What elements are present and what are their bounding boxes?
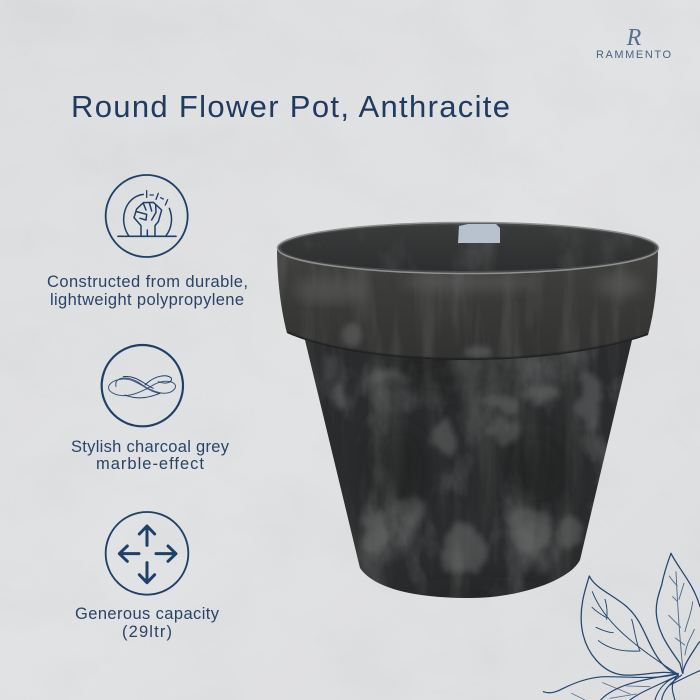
- pot rim: [277, 246, 658, 360]
- feature text: durable: lightweight polypropylene: [50, 291, 244, 309]
- feature text: durable: [47, 273, 248, 309]
- logo: Rammento: [596, 25, 671, 61]
- feature text: marble effect: marble-effect: [96, 455, 204, 473]
- logo monogram: R: [626, 25, 642, 51]
- left leaf: [581, 576, 678, 675]
- title: Round Flower Pot, Anthracite: [71, 89, 510, 124]
- feature text: capacity: [75, 605, 220, 641]
- feature text: marble effect: [71, 438, 230, 473]
- feature text: capacity: Generous capacity: [75, 605, 220, 623]
- logo wordmark: RAMMENTO: [596, 49, 671, 61]
- feature text: durable: Constructed from durable,: [47, 273, 248, 291]
- pot body: [305, 340, 632, 598]
- icon: four arrows in circle: [106, 512, 188, 595]
- feature text: capacity: (29ltr): [122, 623, 172, 641]
- decoration: leaf line art: [543, 553, 700, 700]
- pot photo: [270, 220, 665, 610]
- icon: marble swirl in circle: [102, 345, 183, 426]
- icon: raised fist in circle: [106, 175, 188, 257]
- upper leaf: [656, 553, 700, 673]
- drainage tag inside pot: [458, 224, 500, 243]
- pot opening: [275, 220, 665, 275]
- feature text: marble effect: Stylish charcoal grey: [71, 438, 230, 456]
- lower leaves and stems: [543, 671, 700, 700]
